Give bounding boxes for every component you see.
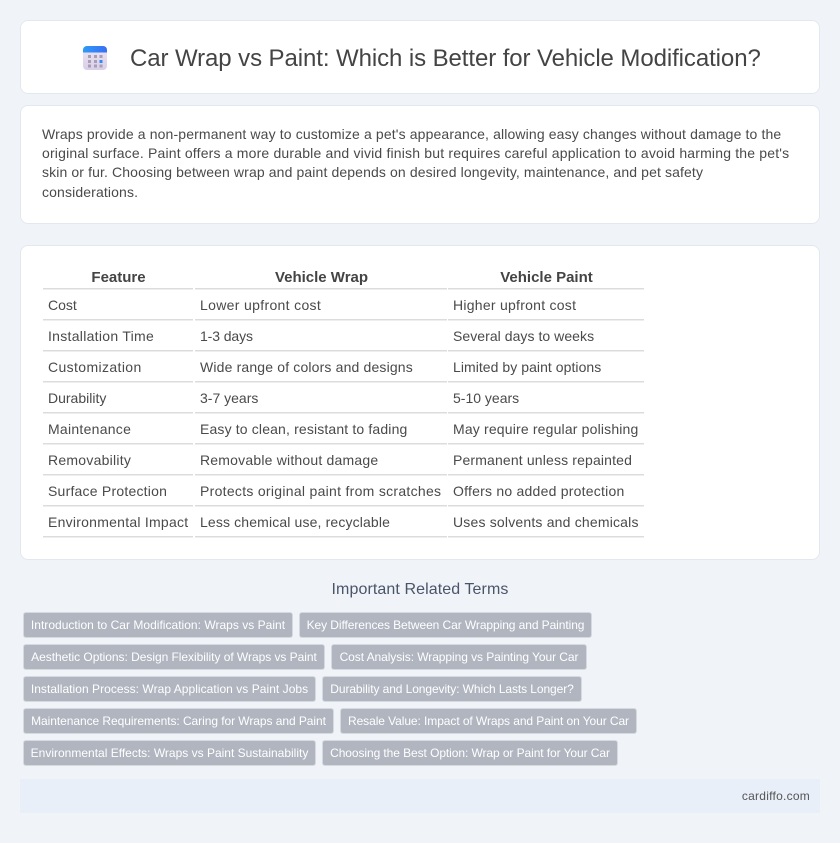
- panel: comparison table: [20, 245, 820, 560]
- comparison table: Removability: [48, 452, 131, 468]
- comparison table: Installation Time: [48, 328, 154, 344]
- comparison table: Maintenance: [48, 421, 131, 437]
- comparison table: Permanent unless repainted: [453, 452, 632, 468]
- icon: calendar: [83, 46, 107, 70]
- related terms tags: [23, 612, 637, 766]
- comparison table: Uses solvents and chemicals: [453, 514, 639, 530]
- footer: [20, 779, 820, 813]
- footer source text: cardiffo.com: [742, 789, 810, 803]
- related terms tags: Resale Value: Impact of Wraps and Paint on Your Car: [348, 714, 629, 728]
- text block: introduction: Wraps provide a non-permanent way to customize a pet's appearance, allowing easy changes without damage to the: [42, 126, 781, 142]
- related terms tags: Introduction to Car Modification: Wraps vs Paint: [31, 618, 285, 632]
- related terms tags: Aesthetic Options: Design Flexibility of Wraps vs Paint: [31, 650, 317, 664]
- text block: introduction: considerations.: [42, 184, 138, 200]
- related terms tags: Environmental Effects: Wraps vs Paint Sustainability: [31, 746, 308, 760]
- text block: introduction: original surface. Paint offers a more durable and vivid finish but requires careful application to avoid harming the pet's: [42, 145, 789, 161]
- comparison table: [43, 269, 644, 538]
- related terms tags: Cost Analysis: Wrapping vs Painting Your Car: [340, 650, 578, 664]
- comparison table: 5-10 years: [453, 390, 519, 406]
- comparison table: Limited by paint options: [453, 359, 601, 375]
- comparison table: Protects original paint from scratches: [200, 483, 441, 499]
- comparison table: 3-7 years: [200, 390, 258, 406]
- panel: title header: [20, 20, 820, 94]
- comparison table: Surface Protection: [48, 483, 167, 499]
- comparison table: May require regular polishing: [453, 421, 638, 437]
- comparison table: Environmental Impact: [48, 514, 188, 530]
- comparison table: Removable without damage: [200, 452, 378, 468]
- panel: introduction: [20, 105, 820, 224]
- title: Car Wrap vs Paint: Which is Better for Vehicle Modification?: [130, 45, 761, 72]
- comparison table: Less chemical use, recyclable: [200, 514, 390, 530]
- comparison table: Wide range of colors and designs: [200, 359, 413, 375]
- comparison table: Lower upfront cost: [200, 297, 321, 313]
- comparison table: Easy to clean, resistant to fading: [200, 421, 407, 437]
- comparison table: Cost: [48, 297, 77, 313]
- comparison table: Vehicle Wrap: [275, 269, 368, 286]
- text block: introduction: [42, 126, 789, 200]
- text block: introduction: skin or fur. Choosing between wrap and paint depends on desired longevity, maintenance, and pet safety: [42, 164, 703, 180]
- comparison table: 1-3 days: [200, 328, 253, 344]
- related terms tags: Choosing the Best Option: Wrap or Paint for Your Car: [330, 746, 610, 760]
- comparison table: Several days to weeks: [453, 328, 594, 344]
- comparison table: Durability: [48, 390, 106, 406]
- related terms tags: Installation Process: Wrap Application vs Paint Jobs: [31, 682, 308, 696]
- heading: related terms: Important Related Terms: [332, 581, 508, 598]
- comparison table: Customization: [48, 359, 142, 375]
- comparison table: Higher upfront cost: [453, 297, 576, 313]
- related terms tags: Key Differences Between Car Wrapping and Painting: [307, 618, 584, 632]
- related terms tags: Maintenance Requirements: Caring for Wraps and Paint: [31, 714, 326, 728]
- comparison table: Vehicle Paint: [500, 269, 593, 286]
- comparison table: Feature: [91, 269, 146, 286]
- related terms tags: Durability and Longevity: Which Lasts Longer?: [330, 682, 574, 696]
- comparison table: Offers no added protection: [453, 483, 624, 499]
